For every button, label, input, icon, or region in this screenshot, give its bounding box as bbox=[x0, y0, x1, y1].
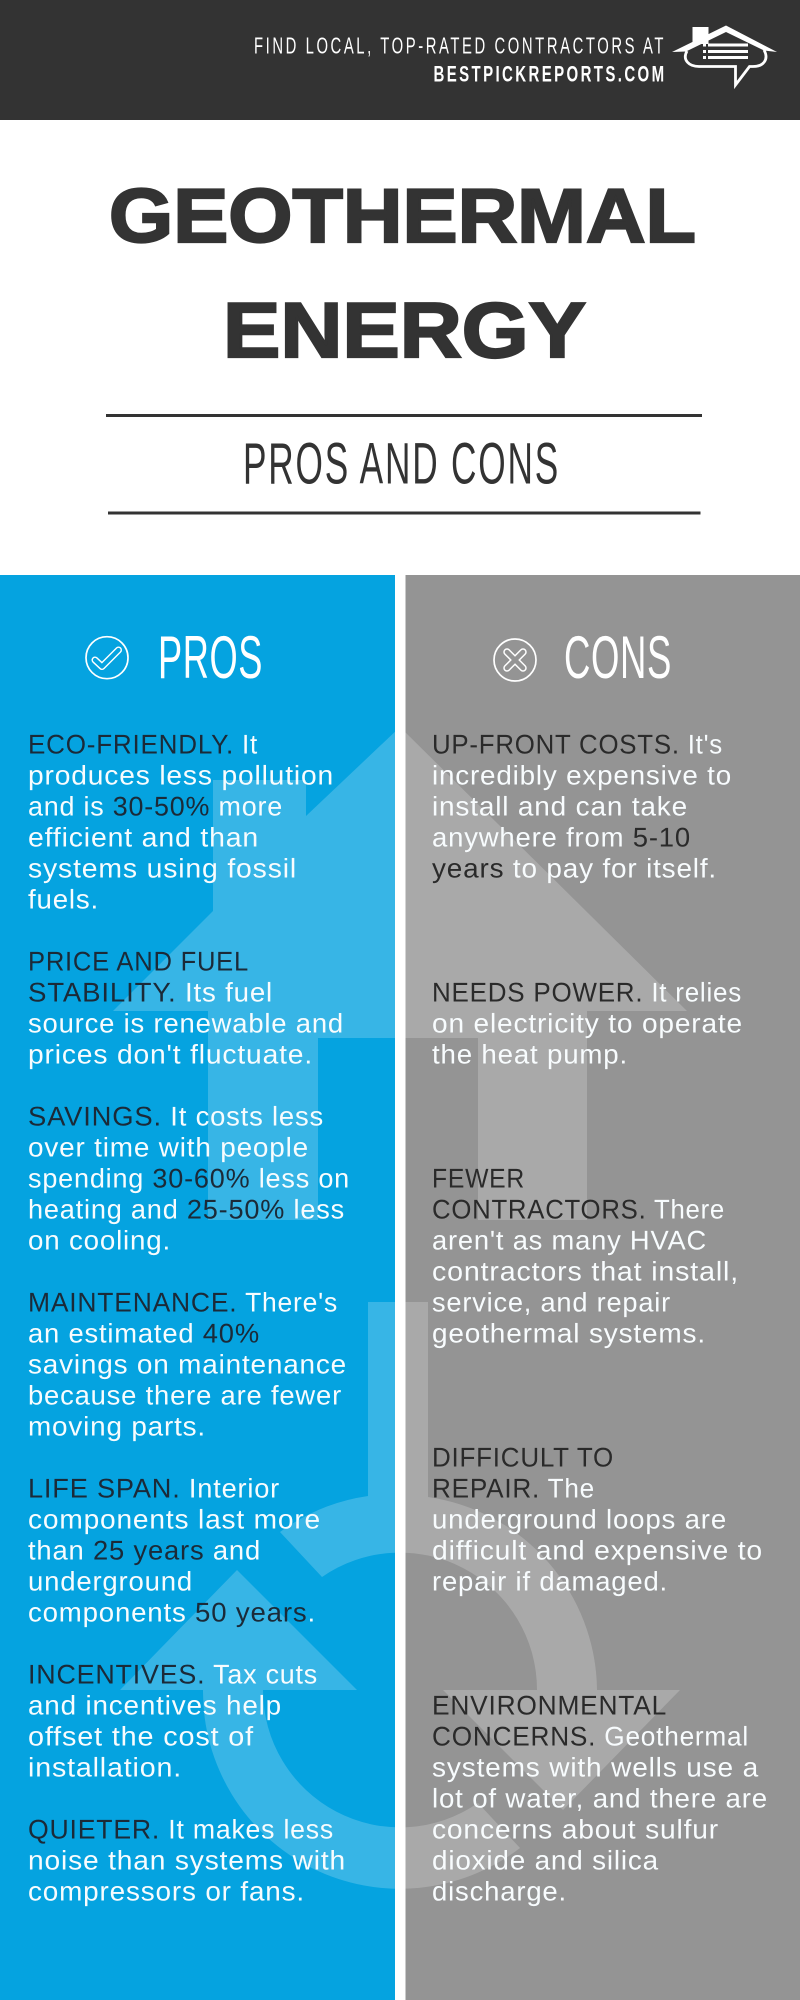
pro: maintenance: MAINTENANCE. There's bbox=[28, 1288, 338, 1318]
con: environmental concerns: concerns about sulfur bbox=[432, 1815, 719, 1845]
pro: quieter: noise than systems with bbox=[28, 1846, 346, 1876]
pro: eco-friendly: produces less pollution bbox=[28, 761, 334, 791]
pro: incentives: INCENTIVES. Tax cuts bbox=[28, 1660, 318, 1690]
icon: check mark in circle bbox=[86, 637, 128, 679]
icon: house speech bubble logo bbox=[672, 26, 777, 85]
con: fewer contractors: service, and repair bbox=[432, 1288, 671, 1318]
pro: savings: on cooling. bbox=[28, 1226, 171, 1256]
con: environmental concerns: systems with wells use a bbox=[432, 1753, 759, 1783]
pro: eco-friendly: systems using fossil bbox=[28, 854, 297, 884]
pro: price and fuel stability: PRICE AND FUEL bbox=[28, 947, 249, 977]
con: fewer contractors: geothermal systems. bbox=[432, 1319, 706, 1349]
pro: incentives: offset the cost of bbox=[28, 1722, 254, 1752]
pro: incentives: and incentives help bbox=[28, 1691, 282, 1721]
con: needs power: on electricity to operate bbox=[432, 1009, 743, 1039]
pro: life span: components 50 years. bbox=[28, 1598, 316, 1628]
pro: price and fuel stability bbox=[28, 947, 344, 1070]
con: up-front costs: incredibly expensive to bbox=[432, 761, 732, 791]
con: difficult to repair: DIFFICULT TO bbox=[432, 1443, 614, 1473]
con: difficult to repair: underground loops are bbox=[432, 1505, 727, 1535]
pro: eco-friendly: efficient and than bbox=[28, 823, 259, 853]
pros heading: PROS bbox=[158, 624, 263, 691]
pro: maintenance: an estimated 40% bbox=[28, 1319, 260, 1349]
pro: life span: underground bbox=[28, 1567, 193, 1597]
con: environmental concerns: ENVIRONMENTAL bbox=[432, 1691, 667, 1721]
cons heading: CONS bbox=[564, 624, 672, 691]
pro: incentives: installation. bbox=[28, 1753, 182, 1783]
pro: life span bbox=[28, 1474, 321, 1628]
panel: pros content bbox=[28, 624, 350, 1907]
pro: savings: heating and 25-50% less bbox=[28, 1195, 345, 1225]
con: up-front costs: UP-FRONT COSTS. It's bbox=[432, 730, 723, 760]
pro: maintenance bbox=[28, 1288, 347, 1442]
pro: savings: SAVINGS. It costs less bbox=[28, 1102, 324, 1132]
pro: incentives bbox=[28, 1660, 318, 1783]
con: environmental concerns: lot of water, and there are bbox=[432, 1784, 768, 1814]
con: environmental concerns: CONCERNS. Geothermal bbox=[432, 1722, 749, 1752]
panel: cons background bbox=[406, 575, 800, 2000]
con: up-front costs: anywhere from 5-10 bbox=[432, 823, 691, 853]
con: environmental concerns: discharge. bbox=[432, 1877, 567, 1907]
pro: savings: over time with people bbox=[28, 1133, 309, 1163]
pro: maintenance: moving parts. bbox=[28, 1412, 206, 1442]
con: difficult to repair: REPAIR. The bbox=[432, 1474, 595, 1504]
con: difficult to repair: difficult and expensive to bbox=[432, 1536, 763, 1566]
con: fewer contractors: aren't as many HVAC bbox=[432, 1226, 707, 1256]
con: up-front costs: years to pay for itself. bbox=[432, 854, 717, 884]
con: fewer contractors: CONTRACTORS. There bbox=[432, 1195, 725, 1225]
header call to action: BESTPICKREPORTS.COM bbox=[434, 62, 666, 86]
panel: pros background bbox=[0, 575, 395, 2000]
pro: life span: components last more bbox=[28, 1505, 321, 1535]
title: ENERGY bbox=[223, 286, 586, 374]
pro: maintenance: savings on maintenance bbox=[28, 1350, 347, 1380]
con: fewer contractors: FEWER bbox=[432, 1164, 525, 1194]
pro: eco-friendly: and is 30-50% more bbox=[28, 792, 283, 822]
pro: price and fuel stability: source is renewable and bbox=[28, 1009, 344, 1039]
pro: savings bbox=[28, 1102, 350, 1256]
pro: quieter: compressors or fans. bbox=[28, 1877, 305, 1907]
icon: x mark in circle bbox=[494, 639, 536, 681]
pro: life span: than 25 years and bbox=[28, 1536, 261, 1566]
title: GEOTHERMAL bbox=[109, 174, 696, 259]
con: difficult to repair: repair if damaged. bbox=[432, 1567, 668, 1597]
con: up-front costs: install and can take bbox=[432, 792, 688, 822]
subtitle with rules: PROS AND CONS bbox=[243, 432, 560, 496]
con: needs power: NEEDS POWER. It relies bbox=[432, 978, 742, 1008]
con: fewer contractors: contractors that install, bbox=[432, 1257, 739, 1287]
con: needs power bbox=[432, 978, 743, 1070]
pro: price and fuel stability: prices don't fluctuate. bbox=[28, 1040, 313, 1070]
pro: maintenance: because there are fewer bbox=[28, 1381, 342, 1411]
pro: eco-friendly bbox=[28, 730, 334, 915]
con: environmental concerns: dioxide and silica bbox=[432, 1846, 659, 1876]
con: up-front costs bbox=[432, 730, 732, 884]
panel: cons content bbox=[432, 624, 768, 1907]
con: fewer contractors bbox=[432, 1164, 739, 1349]
pro: eco-friendly: ECO-FRIENDLY. It bbox=[28, 730, 258, 760]
pro: quieter: QUIETER. It makes less bbox=[28, 1815, 334, 1845]
watermark: geothermal house and loop arrows bbox=[113, 727, 687, 1889]
pro: quieter bbox=[28, 1815, 346, 1907]
con: difficult to repair bbox=[432, 1443, 763, 1597]
header call to action bbox=[254, 32, 666, 86]
pro: life span: LIFE SPAN. Interior bbox=[28, 1474, 280, 1504]
header banner bbox=[0, 0, 800, 120]
title bbox=[109, 174, 696, 374]
con: environmental concerns bbox=[432, 1691, 768, 1907]
pro: savings: spending 30-60% less on bbox=[28, 1164, 350, 1194]
con: needs power: the heat pump. bbox=[432, 1040, 628, 1070]
pro: price and fuel stability: STABILITY. Its fuel bbox=[28, 978, 273, 1008]
pro: eco-friendly: fuels. bbox=[28, 885, 99, 915]
subtitle with rules bbox=[106, 414, 702, 514]
